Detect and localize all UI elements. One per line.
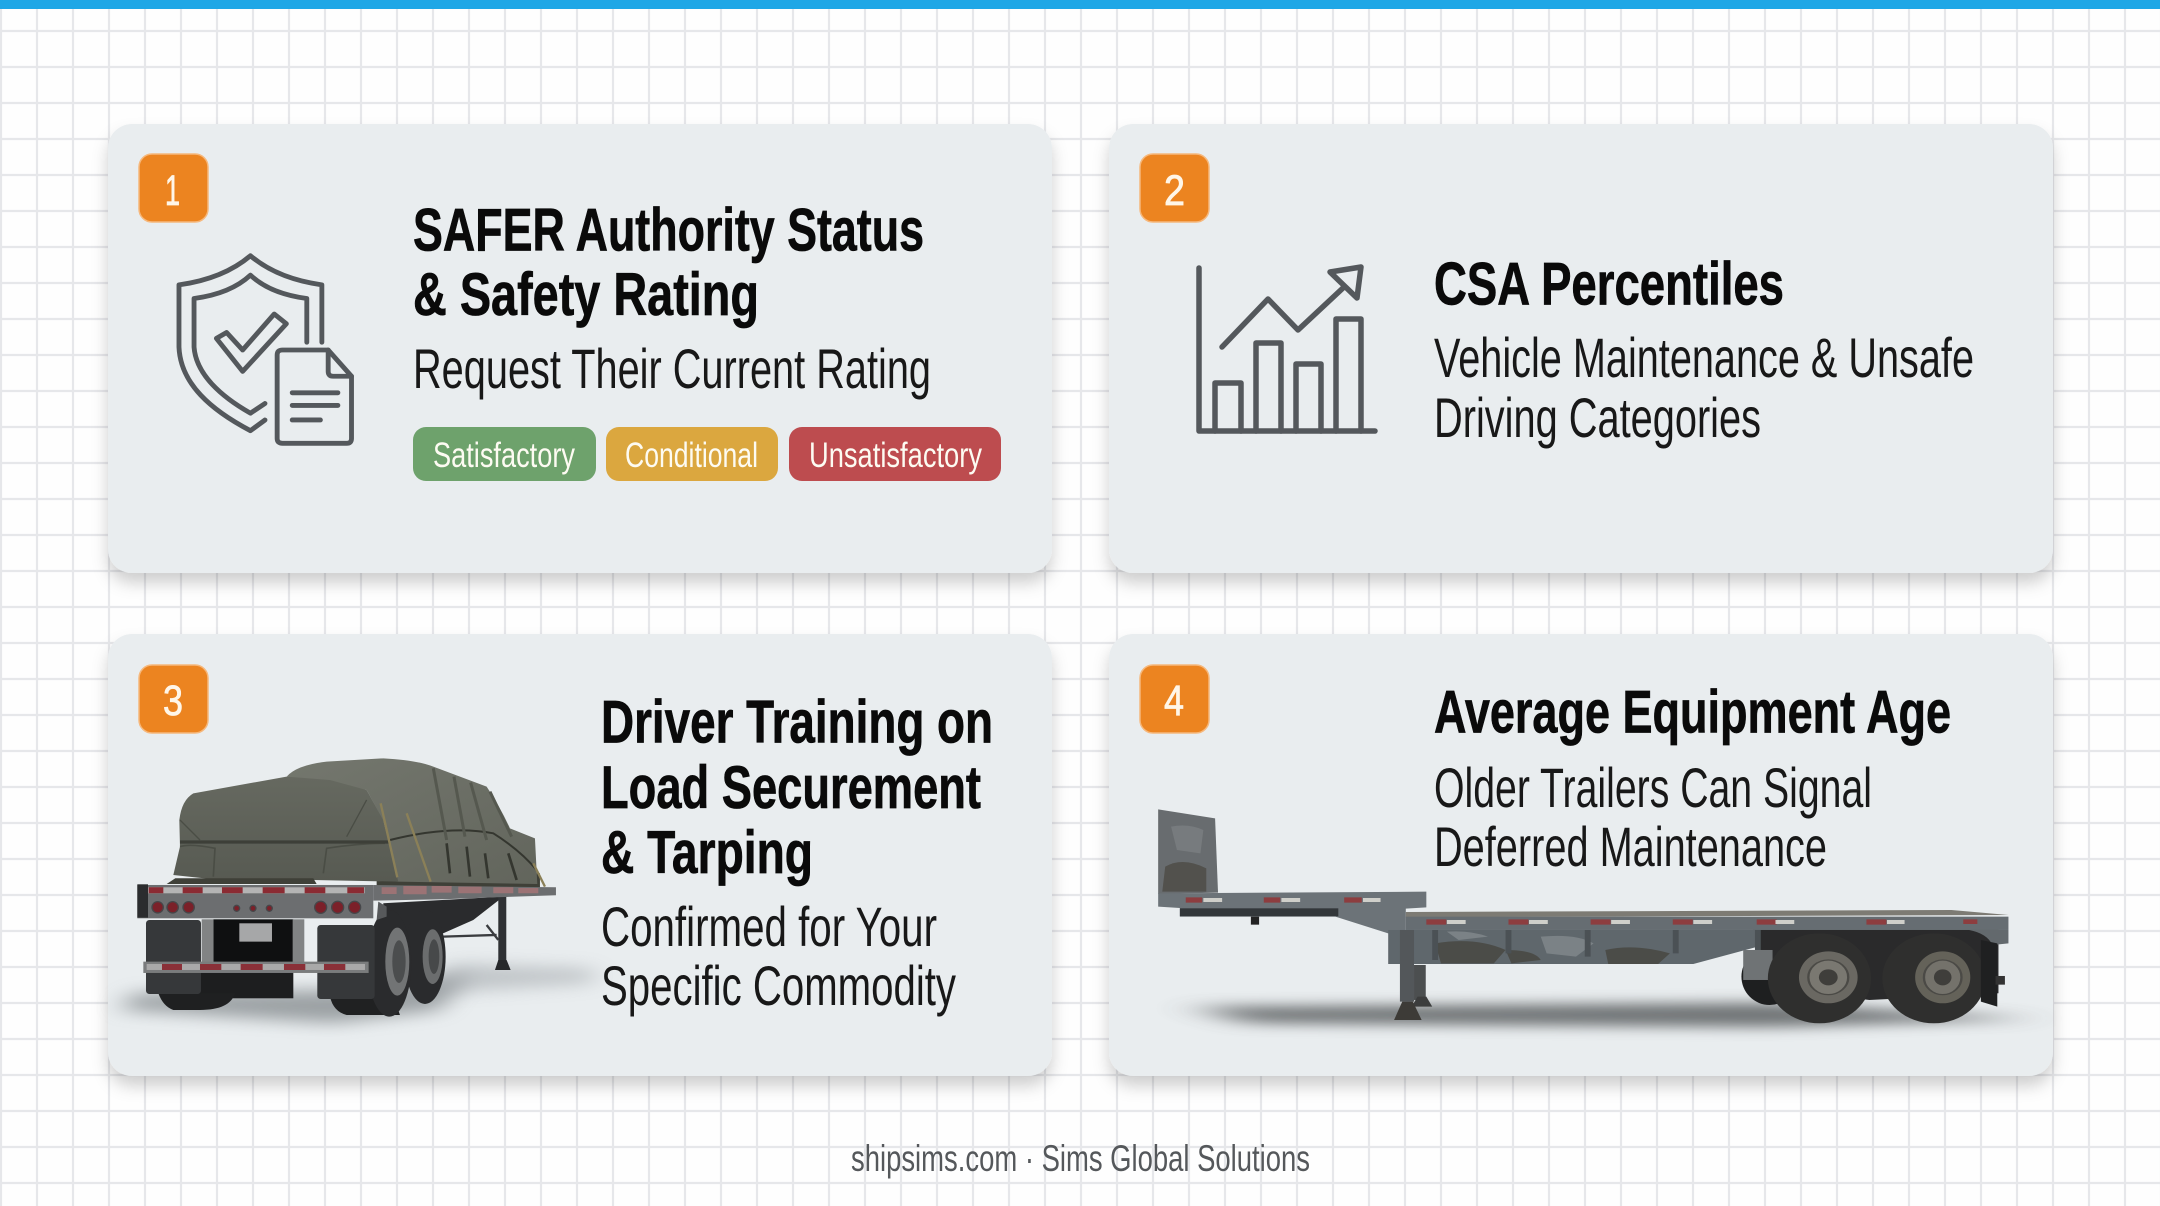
badge 1 [139,154,208,222]
heading: SAFER Authority Status [413,196,924,264]
heading [601,688,993,886]
badge 3 [139,665,208,733]
badge 4 [1140,665,1209,733]
badge 3: 3 [163,677,183,725]
heading: & Tarping [601,819,813,886]
heading [413,196,924,328]
heading: Load Securement [601,754,981,821]
panel: 4 average equipment age [1109,634,2053,1076]
heading: Average Equipment Age [1434,678,1951,746]
icon: bar chart with rising arrow [1199,267,1375,431]
heading: Driver Training on [601,688,993,756]
subheading [1434,326,1974,449]
rating pills [413,427,1001,481]
badge 2 [1140,154,1209,222]
subheading: Older Trailers Can Signal [1434,756,1872,819]
panel: 1 SAFER authority status [108,124,1052,573]
badge 4: 4 [1164,677,1184,725]
subheading: Confirmed for Your [601,895,937,958]
top accent bar [0,0,2160,9]
subheading [1434,756,1872,878]
rating pills: Conditional [625,436,758,475]
icon: shield with checkmark and document [179,256,352,443]
rating pills: Unsatisfactory [809,436,982,475]
badge 1: 1 [165,167,180,215]
panel: 3 driver training [108,634,1052,1076]
panel: 2 CSA percentiles [1109,124,2053,573]
subheading: Driving Categories [1434,386,1761,449]
footer: shipsims.com · Sims Global Solutions [851,1138,1310,1179]
subheading: Deferred Maintenance [1434,815,1827,878]
subheading: Request Their Current Rating [413,337,931,400]
heading: CSA Percentiles [1434,250,1784,318]
illustration: tarped flatbed trailer, rear view [120,758,593,1023]
subheading [601,895,956,1017]
illustration: aged drop-deck flatbed trailer, side view [1158,809,2034,1027]
badge 2: 2 [1164,167,1185,215]
rating pills: Satisfactory [433,436,575,475]
subheading: Specific Commodity [601,954,956,1017]
heading: & Safety Rating [413,261,759,328]
